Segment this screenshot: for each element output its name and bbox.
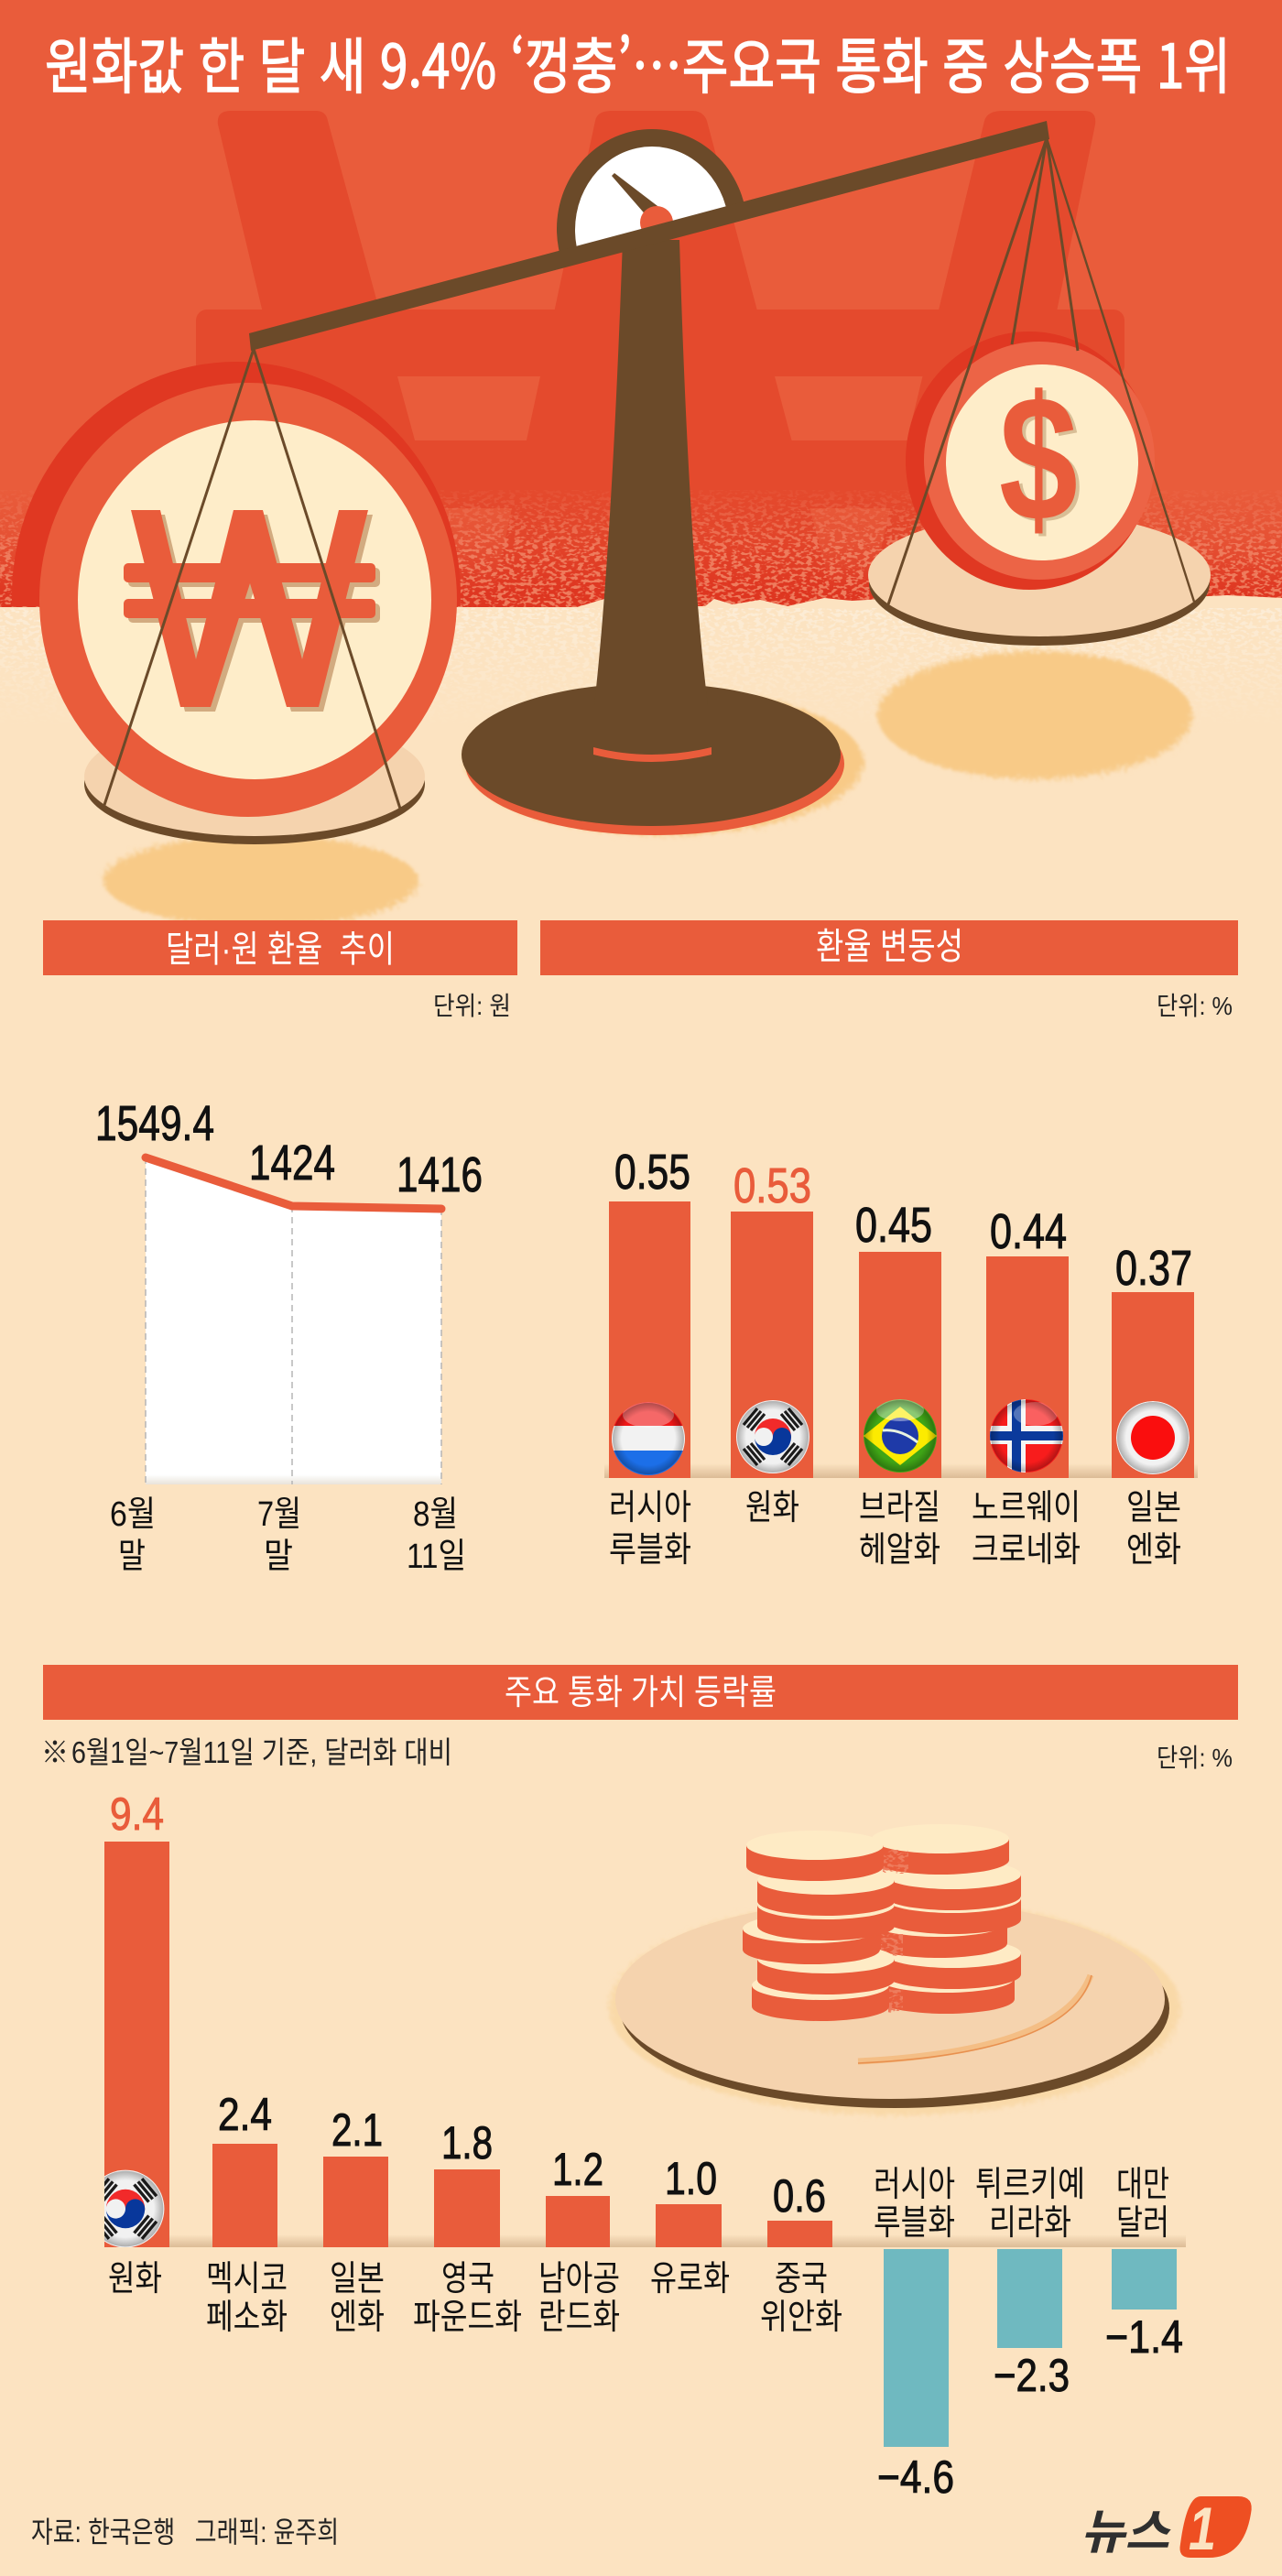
icon: korea flag: [736, 1400, 809, 1473]
category labels: 루블화: [609, 1531, 691, 1570]
x axis labels: 말: [264, 1538, 293, 1576]
category labels: 루블화: [874, 2204, 955, 2243]
bar chart: currency change: [87, 1788, 1186, 2503]
heading: currency change: 주요 통화 가치 등락률: [505, 1674, 777, 1712]
shadow under left pan: [103, 835, 418, 927]
bar south africa: 1.2: [552, 2144, 603, 2195]
category labels: 파운드화: [413, 2299, 522, 2337]
bar south africa: [546, 2144, 610, 2247]
bar japan: [323, 2104, 388, 2247]
category labels: 러시아: [609, 1489, 691, 1527]
icon: japan flag: [1116, 1401, 1190, 1474]
bar brazil: 0.45: [855, 1198, 932, 1253]
won coin: [12, 362, 461, 829]
bar japan: 0.37: [1115, 1241, 1192, 1296]
icon: won symbol: [124, 510, 375, 707]
category labels: 원화: [745, 1489, 799, 1527]
bar norway: [986, 1204, 1069, 1478]
illustration: coins on plate: [609, 1824, 1180, 2115]
bar won: 9.4: [110, 1788, 164, 1840]
area under line: [146, 1158, 441, 1484]
dollar coin: [906, 332, 1155, 590]
x axis labels: 7월: [257, 1495, 301, 1534]
bar euro: 1.0: [665, 2153, 717, 2204]
heading: dollar-won trend: 달러·원 환율 추이: [166, 929, 395, 970]
category labels: 일본: [330, 2260, 385, 2299]
rate line: [146, 1158, 441, 1209]
hero illustration background: [0, 0, 1282, 679]
scale post: [594, 240, 708, 705]
bar mexico: 2.4: [218, 2089, 272, 2140]
bar korea: [731, 1158, 813, 1478]
category labels: 위안화: [760, 2299, 842, 2337]
category labels: 란드화: [538, 2299, 620, 2337]
bar russia: [877, 2249, 954, 2503]
note: period basis: 6월1일~7월11일 기준, 달러화 대비: [71, 1735, 452, 1769]
category labels: 달러: [1116, 2204, 1169, 2243]
scale dial: [557, 129, 744, 251]
right pan strings: [887, 138, 1194, 607]
bar japan: [1112, 1241, 1194, 1478]
category labels: 헤알화: [859, 1531, 940, 1570]
category labels: 리라화: [989, 2204, 1071, 2243]
source credit: 자료: 한국은행 그래픽: 윤주희: [31, 2516, 339, 2549]
unit label: percent: 단위: %: [1157, 1744, 1233, 1772]
scale base: [462, 683, 844, 835]
bar norway: 0.44: [990, 1204, 1067, 1259]
bar turkey: [994, 2249, 1070, 2401]
note: period basis: ※: [41, 1735, 69, 1769]
dollar coin: $: [999, 359, 1078, 559]
bar won: [104, 1788, 169, 2247]
bar taiwan: −1.4: [1105, 2311, 1183, 2363]
bar turkey: −2.3: [994, 2350, 1070, 2401]
bar russia: [609, 1145, 690, 1478]
category labels: 멕시코: [206, 2260, 288, 2299]
category labels: 일본: [1126, 1489, 1181, 1527]
bar china: [767, 2170, 832, 2247]
value 1424: 1424: [249, 1136, 335, 1190]
left coin stack: [743, 1831, 895, 2021]
x axis labels: 8월: [413, 1495, 458, 1534]
ground: [0, 595, 1282, 925]
category labels: 튀르키예: [975, 2166, 1085, 2204]
right pan with dollar coin: [868, 138, 1211, 646]
category labels: 유로화: [650, 2260, 730, 2299]
category labels: 대만: [1116, 2166, 1169, 2204]
heading: currency change: [43, 1665, 1238, 1720]
bar mexico: [212, 2089, 277, 2247]
background won symbol: [196, 111, 1124, 561]
bar chart: volatility: [604, 1145, 1198, 1570]
bar russia: −4.6: [877, 2451, 954, 2503]
category labels: 남아공: [538, 2260, 620, 2299]
icon: won symbol shadow: [128, 515, 380, 712]
unit label: won: 단위: 원: [433, 992, 511, 1020]
line chart: exchange rate: [95, 1096, 483, 1576]
icon: norway flag: [990, 1399, 1063, 1473]
x axis labels: [110, 1495, 466, 1576]
category labels: 페소화: [206, 2299, 288, 2337]
bar brazil: [855, 1198, 941, 1478]
category labels: 브라질: [859, 1489, 940, 1527]
heading: dollar-won trend: [43, 920, 517, 975]
category labels: [609, 1489, 1181, 1570]
bar japan: 2.1: [331, 2104, 383, 2156]
category labels: 원화: [108, 2260, 162, 2299]
unit label: percent: 단위: %: [1157, 992, 1233, 1020]
icon: korea flag: [104, 2170, 165, 2247]
category labels: 영국: [441, 2260, 494, 2299]
bar korea: 0.53: [733, 1158, 811, 1213]
x axis labels: 11일: [407, 1538, 466, 1576]
bar taiwan: [1105, 2249, 1183, 2363]
category labels: 노르웨이: [972, 1489, 1081, 1527]
icon: balance scale: [249, 121, 1049, 835]
scale base shadow: [464, 689, 864, 835]
scale beam: [249, 121, 1049, 351]
bar russia: 0.55: [614, 1145, 690, 1200]
heading: volatility: 환율 변동성: [816, 927, 963, 967]
value 1416: 1416: [397, 1147, 483, 1202]
value 1549.4: 1549.4: [95, 1096, 214, 1151]
category labels: 중국: [775, 2260, 828, 2299]
x axis labels: 말: [118, 1538, 146, 1576]
category labels: 러시아: [874, 2166, 955, 2204]
logo: news1: [1081, 2494, 1252, 2562]
category labels: 엔화: [1126, 1531, 1181, 1570]
dollar coin: $: [1003, 362, 1081, 561]
x axis labels: 6월: [110, 1495, 156, 1534]
category labels: [108, 2166, 1169, 2337]
right pan: [868, 514, 1211, 646]
category labels: 엔화: [330, 2299, 385, 2337]
bar uk: [434, 2117, 500, 2247]
left pan strings: [104, 349, 400, 809]
bar uk: 1.8: [441, 2117, 493, 2168]
logo: news1: 뉴스: [1081, 2506, 1171, 2560]
shadow under right pan: [877, 651, 1192, 779]
icon: russia flag: [612, 1402, 685, 1476]
plate: [609, 1899, 1180, 2115]
bar china: 0.6: [773, 2170, 826, 2222]
left pan: [84, 717, 425, 844]
left pan with won coin: [12, 349, 461, 844]
logo: news1: 1: [1189, 2494, 1216, 2562]
bar euro: [656, 2153, 722, 2247]
heading: volatility: [540, 920, 1238, 975]
icon: brazil flag: [864, 1399, 937, 1473]
right coin stack: [870, 1824, 1021, 2014]
category labels: 크로네화: [972, 1531, 1081, 1570]
